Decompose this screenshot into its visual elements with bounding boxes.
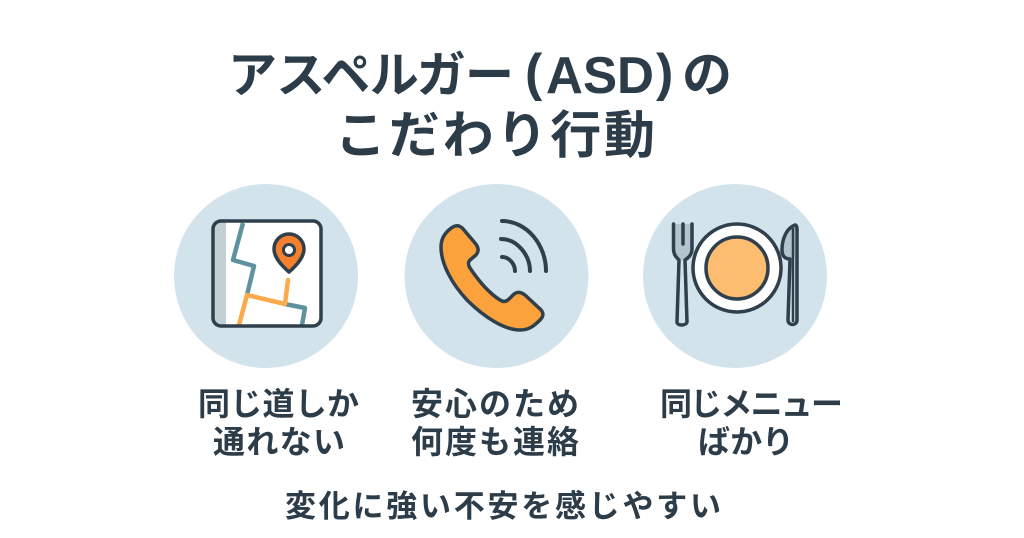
title: こだわり行動 — [335, 107, 655, 164]
title — [228, 44, 732, 164]
icon: map with pin — [213, 221, 321, 326]
title: アスペルガー — [228, 49, 514, 103]
icon background: route — [174, 184, 358, 368]
label: contact: 安心のため — [411, 386, 579, 422]
label: route: 通れない — [213, 424, 345, 460]
panel: same route — [174, 184, 359, 460]
caption: 変化に強い不安を感じやすい — [285, 489, 721, 524]
icon background: phone — [404, 184, 588, 368]
label: menu: 同じメニュー — [660, 386, 843, 422]
title: ( — [525, 44, 543, 102]
label: menu — [660, 386, 843, 460]
title: の — [682, 47, 732, 103]
panel: repeated contact — [404, 184, 588, 460]
icon background: meal — [643, 184, 827, 368]
title: ) — [656, 44, 673, 102]
label: menu: ばかり — [698, 424, 794, 460]
icon: plate and cutlery — [673, 224, 797, 325]
label: contact — [411, 386, 579, 460]
label: contact: 何度も連絡 — [411, 424, 579, 460]
label: route — [198, 386, 359, 460]
label: route: 同じ道しか — [198, 386, 359, 422]
icon: phone with signal waves — [441, 221, 546, 330]
title: ASD — [546, 47, 654, 105]
panel: same menu — [643, 184, 843, 460]
